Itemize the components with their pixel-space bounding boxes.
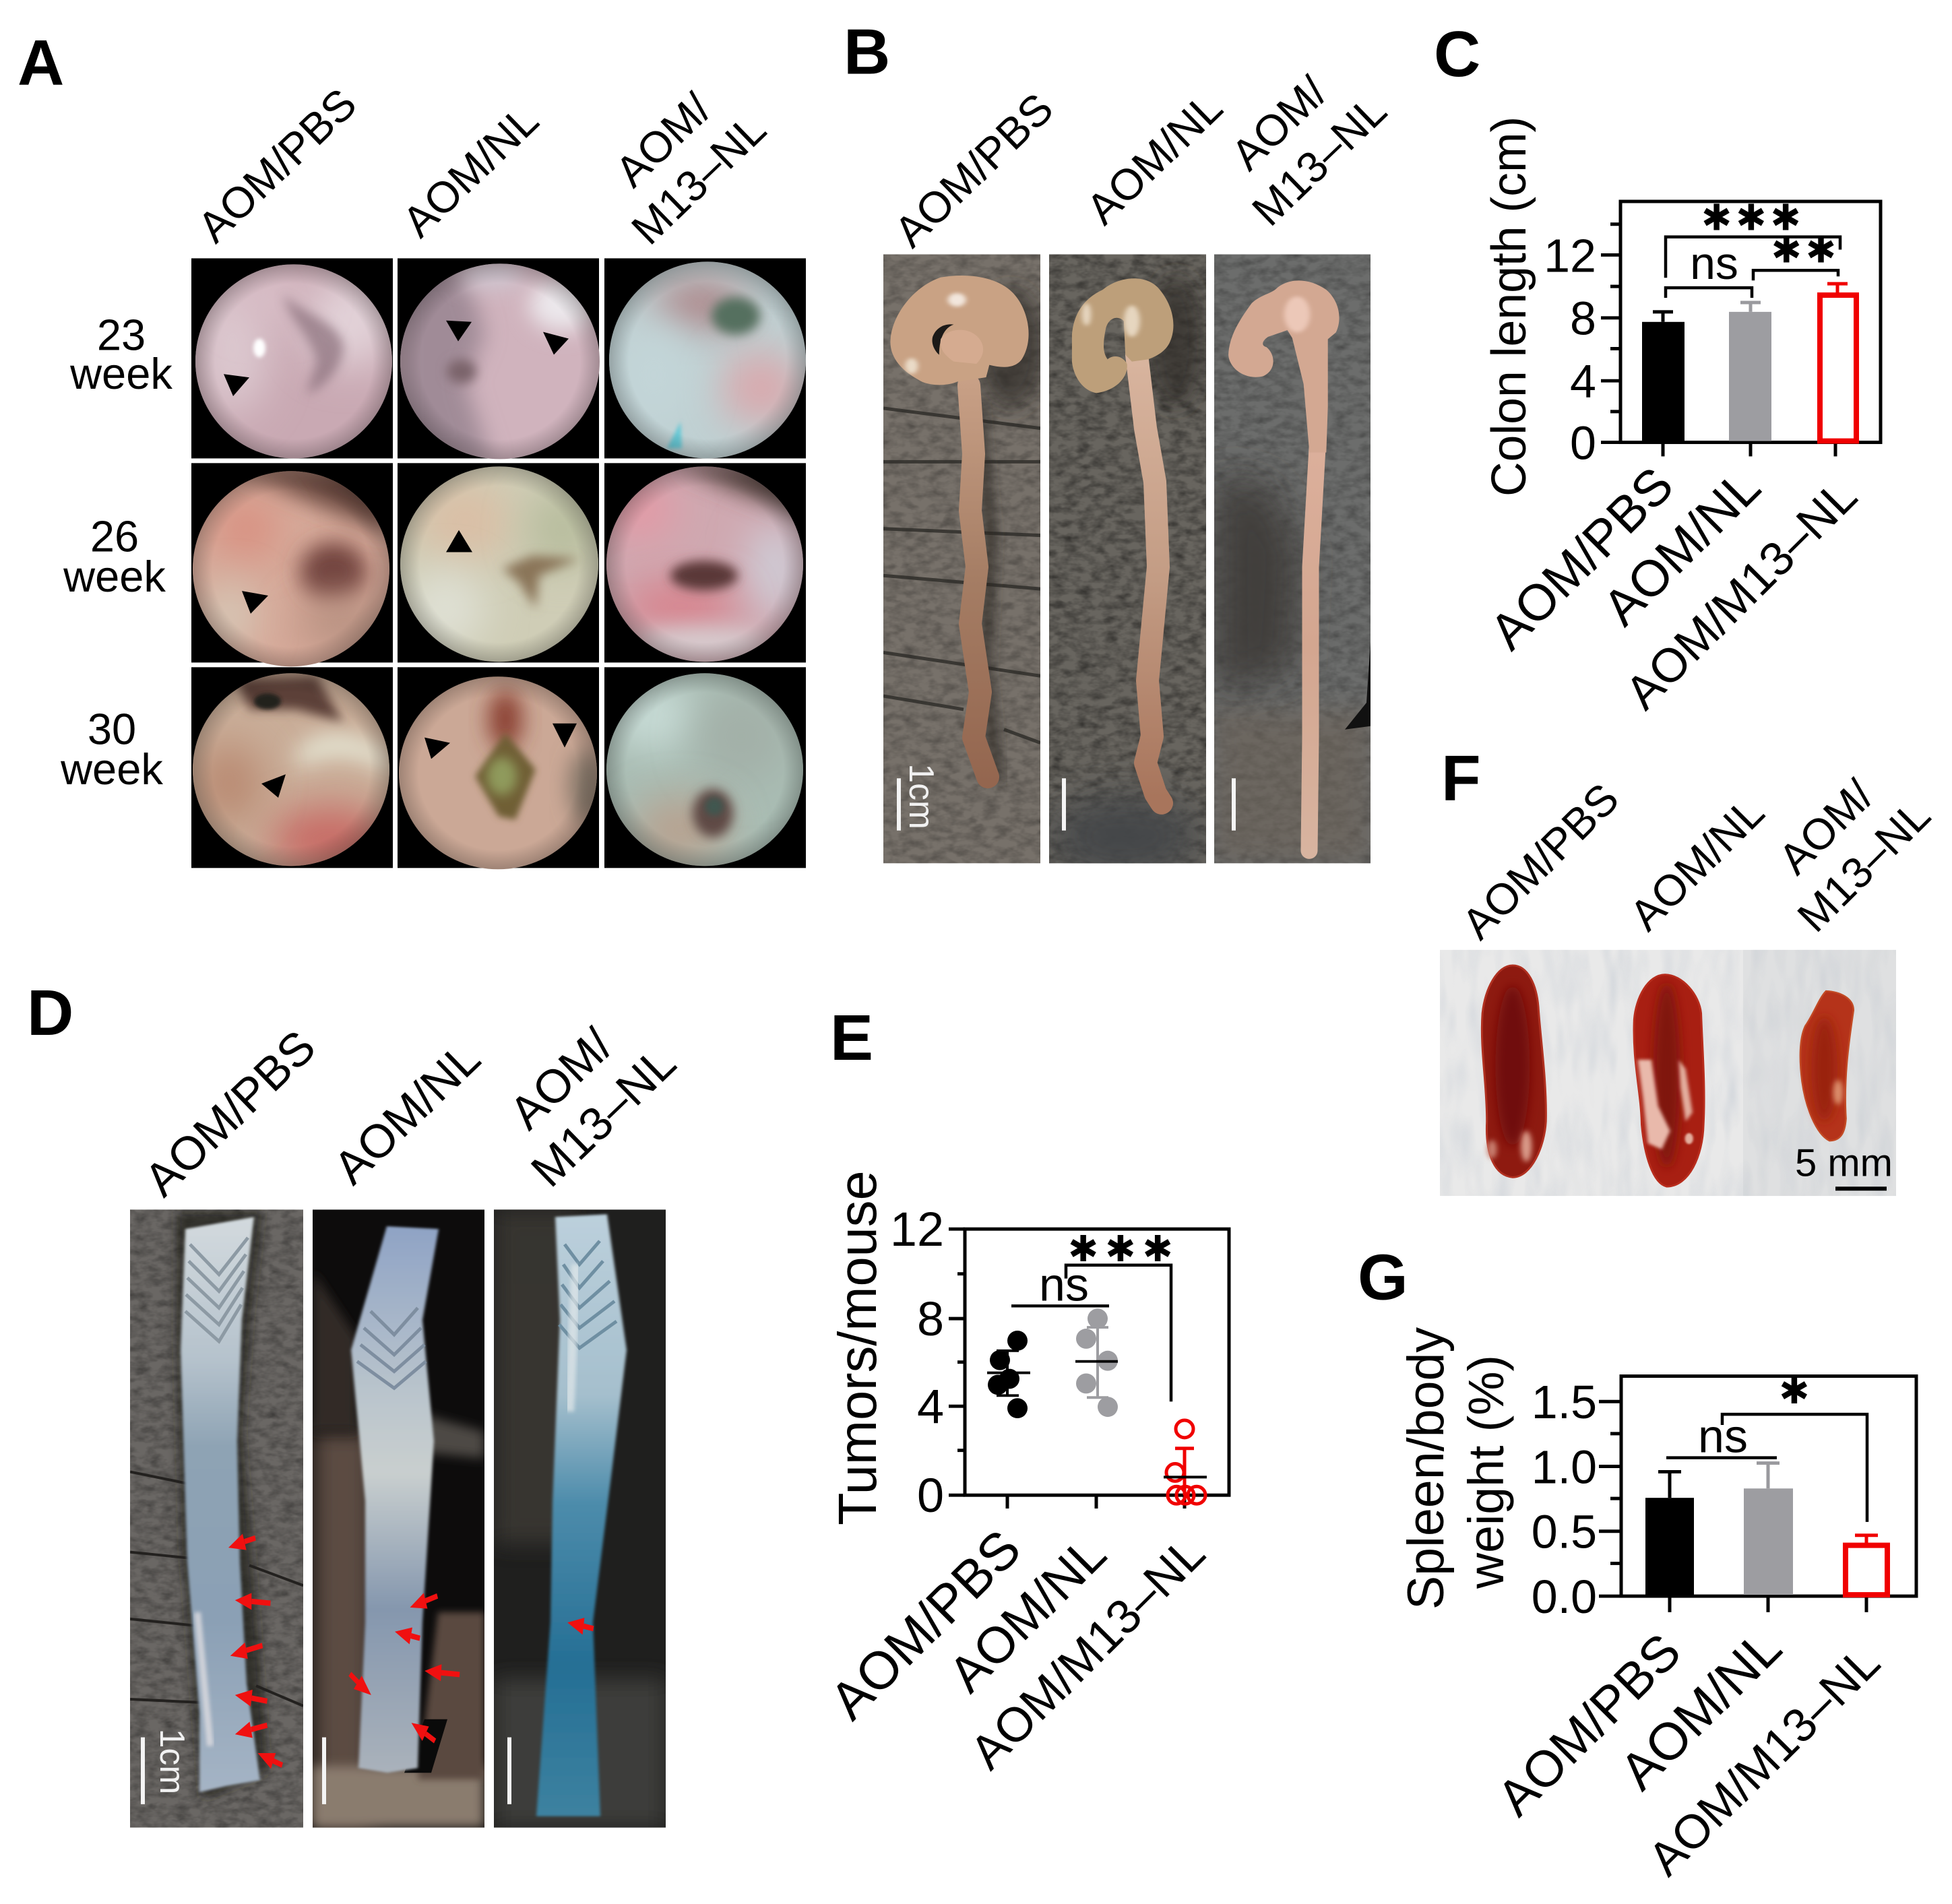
significance labels [1039, 1228, 1180, 1310]
colon curl [1228, 280, 1340, 453]
row labels A: week [69, 349, 172, 398]
photo: AOM/PBS colon [883, 254, 1044, 863]
scale bar [507, 1738, 511, 1804]
image: 26 week AOM/M13-NL [605, 465, 809, 666]
significance labels: ns [1690, 239, 1738, 289]
column labels A: AOM/ [606, 84, 720, 196]
axis tick values: 4 [917, 1380, 944, 1434]
scale bar [1062, 778, 1066, 831]
column labels D: AOM/ [499, 1018, 623, 1139]
significance brackets [1666, 1414, 1867, 1522]
column labels A [188, 79, 775, 254]
spleen: AOM/M13-NL [1800, 991, 1854, 1141]
significance labels: ✱✱✱ [1701, 197, 1805, 239]
scale bar 1cm: 1cm [153, 1729, 192, 1794]
chart frame and axes [1601, 201, 1881, 456]
photo: AOM/M13-NL opened colon [494, 1209, 666, 1828]
significance brackets [1666, 237, 1840, 298]
axis tick values [890, 1203, 944, 1523]
scale bar 1cm: 1cm [902, 763, 941, 829]
scatter: AOM/M13-NL points [1164, 1420, 1207, 1504]
image: 23 week AOM/PBS [189, 261, 398, 462]
axis tick values: 0 [917, 1469, 944, 1523]
y axis title: weight (%) [1458, 1355, 1514, 1589]
x axis labels: AOM/PBS [819, 1519, 1032, 1731]
x axis labels [1486, 1618, 1890, 1885]
column labels A: AOM/NL [393, 95, 548, 247]
axis tick values: 12 [890, 1203, 944, 1257]
y axis title [1397, 1327, 1514, 1610]
scale bar 5 mm: 5 mm [1795, 1142, 1893, 1184]
spleen: AOM/NL [1634, 975, 1704, 1186]
bars [1642, 284, 1856, 441]
column labels B [885, 67, 1395, 257]
photo: AOM/NL opened colon [313, 1209, 484, 1828]
panel C: colon length bar chart [1434, 19, 1881, 719]
row labels A [60, 311, 172, 794]
axis tick values: 0.0 [1532, 1570, 1597, 1623]
chart frame and axes [949, 1229, 1229, 1509]
icon: black arrowheads [224, 321, 577, 798]
colon curl [1072, 278, 1173, 393]
axis tick values: 0 [1570, 417, 1596, 469]
x axis labels: AOM/NL [1609, 1618, 1792, 1801]
significance brackets [1011, 1265, 1171, 1401]
column labels F: AOM/ [1769, 770, 1883, 883]
endoscopy image grid [189, 258, 809, 873]
panel D: opened colon photos [27, 977, 686, 1828]
column labels D: M13–NL [521, 1036, 686, 1197]
axis tick values: 4 [1570, 355, 1596, 408]
column labels F: M13–NL [1788, 790, 1940, 941]
significance labels: ns [1039, 1259, 1089, 1310]
x axis labels: AOM/NL [1592, 458, 1771, 637]
photo: AOM/PBS opened colon [130, 1209, 303, 1828]
heading A: A [18, 27, 64, 99]
image: 30 week AOM/NL [398, 672, 606, 873]
bars [1645, 1463, 1887, 1595]
scale bar 1cm [141, 1729, 192, 1804]
photo: AOM/NL colon [1049, 254, 1206, 877]
axis tick values: 8 [1570, 292, 1596, 345]
column labels B: AOM/ [1222, 67, 1336, 179]
heading B: B [844, 16, 890, 88]
column labels D: AOM/PBS [134, 1020, 325, 1206]
x axis labels: AOM/M13–NL [1638, 1635, 1890, 1885]
heading G: G [1358, 1242, 1408, 1313]
photo: AOM/M13-NL colon [1214, 254, 1371, 863]
axis tick values [1544, 229, 1596, 469]
scale bar 1cm [897, 766, 934, 831]
row labels A: 30 [88, 705, 136, 754]
x axis labels: AOM/M13–NL [1615, 469, 1867, 719]
scatter: AOM/PBS points [987, 1331, 1030, 1418]
scale bar [322, 1738, 326, 1804]
row labels A: 23 [97, 311, 146, 359]
significance labels: ✱✱✱ [1068, 1228, 1180, 1270]
colon curl [890, 276, 1029, 385]
column labels B: AOM/NL [1077, 83, 1232, 234]
x axis labels: AOM/NL [938, 1525, 1117, 1703]
column labels D: AOM/NL [323, 1032, 490, 1194]
significance labels: ✱✱ [1771, 229, 1840, 271]
row labels A: week [60, 744, 163, 794]
axis tick values [1532, 1376, 1597, 1623]
axis tick values: 8 [917, 1292, 944, 1346]
column labels D [134, 1018, 686, 1206]
column labels F: AOM/NL [1620, 787, 1773, 940]
y axis title: Tumors/mouse [827, 1170, 887, 1525]
column labels F: AOM/PBS [1452, 773, 1628, 949]
significance labels [1690, 197, 1840, 289]
row labels A: 26 [90, 512, 139, 561]
y axis title: Spleen/body [1397, 1327, 1455, 1610]
panel G: spleen to body weight bar chart [1358, 1242, 1916, 1885]
significance labels [1698, 1370, 1810, 1463]
panel A: endoscopy images [18, 27, 809, 873]
panel B: whole colon photos [844, 16, 1395, 877]
x axis labels [1479, 456, 1867, 719]
image: 23 week AOM/NL [398, 259, 606, 462]
image: 30 week AOM/M13-NL [605, 669, 807, 870]
x axis labels: AOM/PBS [1486, 1623, 1692, 1827]
column labels A: M13–NL [622, 104, 775, 254]
image: 26 week AOM/PBS [189, 468, 398, 669]
axis tick values: 1.0 [1532, 1441, 1597, 1493]
axis tick values: 1.5 [1532, 1376, 1597, 1428]
significance labels: ns [1698, 1410, 1748, 1463]
image: 26 week AOM/NL [398, 465, 606, 666]
heading E: E [830, 1002, 873, 1074]
y axis title: Colon length (cm) [1482, 117, 1536, 497]
column labels B: AOM/PBS [885, 84, 1063, 257]
column labels F [1452, 770, 1940, 949]
x axis labels: AOM/M13–NL [960, 1526, 1216, 1779]
x axis labels [819, 1519, 1216, 1779]
x axis labels: AOM/PBS [1479, 456, 1685, 660]
scatter: AOM/NL points [1075, 1308, 1118, 1417]
axis tick values: 12 [1544, 229, 1596, 282]
icon: red arrows marking tumors [228, 1533, 594, 1769]
photo: spleens on gauze [1440, 950, 1896, 1196]
image: 23 week AOM/M13-NL [606, 261, 809, 462]
image: 30 week AOM/PBS [193, 673, 389, 866]
heading F: F [1441, 742, 1481, 814]
column labels A: AOM/PBS [188, 79, 366, 252]
scale bar [1232, 778, 1236, 831]
panel E: tumors per mouse scatter plot [819, 1002, 1229, 1779]
axis tick values: 0.5 [1532, 1506, 1597, 1558]
spleen: AOM/PBS [1482, 965, 1546, 1177]
significance labels: ✱ [1779, 1370, 1810, 1412]
row labels A: week [63, 552, 166, 601]
heading D: D [27, 977, 73, 1049]
panel F: spleen photos [1440, 742, 1940, 1196]
chart frame and axes [1599, 1376, 1916, 1612]
column labels B: M13–NL [1242, 86, 1395, 235]
heading C: C [1434, 19, 1480, 90]
